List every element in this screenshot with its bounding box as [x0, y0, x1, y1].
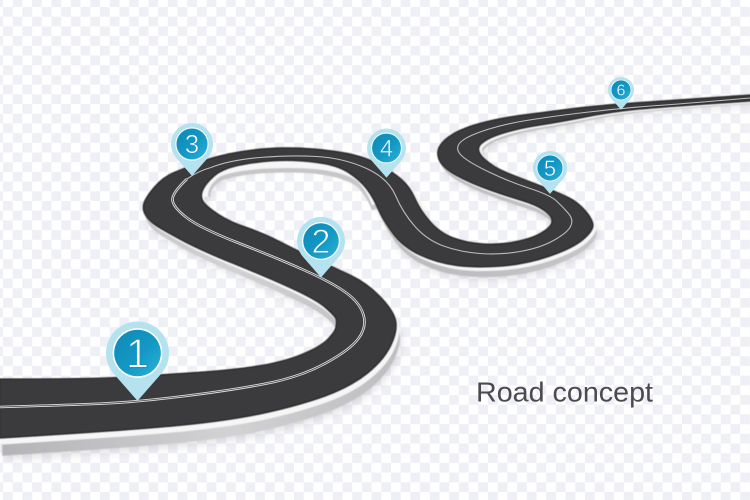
pin 4	[367, 129, 406, 178]
pin 1	[106, 322, 169, 401]
pin 2	[297, 217, 345, 277]
road side wall	[2, 96, 750, 455]
pin 1: 1	[126, 330, 149, 376]
pin 2: 2	[312, 223, 330, 261]
pin 6	[608, 77, 634, 110]
pin 3: 3	[185, 129, 199, 159]
pin 3	[171, 123, 213, 176]
road centre line: single section	[187, 98, 750, 254]
caption: Road concept	[476, 376, 653, 408]
road surface	[0, 95, 750, 438]
pin 6: 6	[617, 82, 626, 100]
winding road	[0, 95, 750, 459]
road shadow	[5, 99, 750, 459]
pin 5: 5	[544, 156, 556, 181]
pin 4: 4	[380, 136, 393, 162]
pin 5	[533, 151, 567, 194]
road centre line: double section	[0, 179, 365, 407]
